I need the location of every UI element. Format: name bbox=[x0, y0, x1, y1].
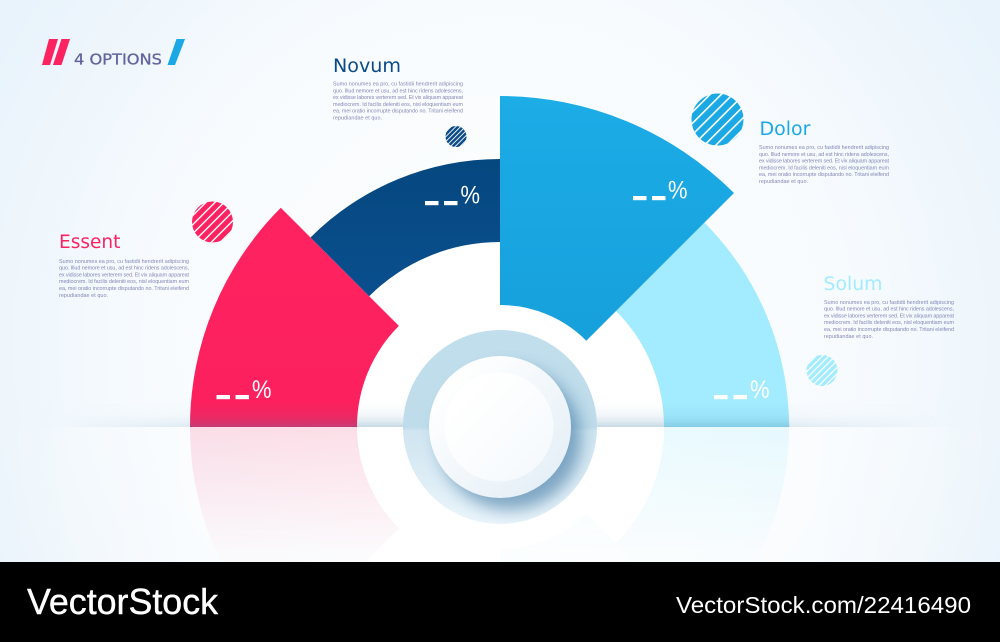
block: Novum: ea, mei oratio incorrupte disputando no. Tritani eleifend bbox=[333, 109, 463, 115]
block: Novum: Sumo nonumes ea pro, cu fastidii hendrerit adipiscing bbox=[333, 82, 463, 88]
block: Solum: mediocrem. Id facilis deleniti eos, nisl eloquentiam eum bbox=[824, 320, 954, 326]
block: Dolor: ea, mei oratio incorrupte disputando no. Tritani eleifend bbox=[759, 172, 889, 178]
icon: Solum hatch circle bbox=[806, 355, 838, 386]
block: Essent bbox=[59, 232, 190, 299]
block: Essent: ea, mei oratio incorrupte disputando no. Tritani eleifend bbox=[59, 286, 189, 292]
block: Dolor bbox=[759, 119, 890, 185]
sector: Solum bbox=[616, 223, 789, 427]
block: Solum: ex vidisse labores verterem sed. Et vix aliquam appareat bbox=[824, 313, 954, 319]
sector: Novum bbox=[310, 159, 500, 296]
sector: Dolor bbox=[500, 96, 734, 341]
icon: Dolor hatch circle bbox=[692, 94, 744, 146]
block: Solum bbox=[824, 274, 954, 340]
centre plate bbox=[429, 356, 571, 498]
block: Novum: quo. Illud nemore et usu, ad est hinc ridens adolescens, bbox=[333, 88, 464, 94]
block: Dolor: Dolor bbox=[760, 119, 811, 140]
block: Essent: quo. Illud nemore et usu, ad est hinc ridens adolescens, bbox=[59, 266, 190, 272]
value: Solum: % bbox=[750, 376, 770, 404]
value: Essent: % bbox=[252, 376, 272, 404]
value: Solum bbox=[714, 376, 770, 404]
reflection of the chart bbox=[190, 427, 789, 526]
value: Novum bbox=[425, 182, 480, 210]
block: Dolor: Sumo nonumes ea pro, cu fastidii hendrerit adipiscing bbox=[759, 145, 889, 151]
floor tint bbox=[0, 427, 1000, 562]
block: Essent: Sumo nonumes ea pro, cu fastidii hendrerit adipiscing bbox=[59, 259, 189, 265]
ring shadow bbox=[439, 368, 581, 510]
block: Solum: repudiandae et quo. bbox=[824, 334, 873, 340]
value: Dolor: % bbox=[668, 176, 688, 204]
block: Essent: Essent bbox=[59, 232, 120, 253]
white centre bbox=[357, 242, 664, 427]
block: Solum: ea, mei oratio incorrupte disputando no. Tritani eleifend bbox=[824, 327, 954, 333]
title badge bbox=[42, 39, 185, 68]
block: Dolor: mediocrem. Id facilis deleniti eos, nisl eloquentiam eum bbox=[759, 165, 890, 171]
footer bar bbox=[0, 562, 1000, 642]
block: Novum: mediocrem. Id facilis deleniti eos, nisl eloquentiam eum bbox=[333, 102, 464, 108]
block: Dolor: repudiandae et quo. bbox=[759, 179, 808, 185]
value: Dolor bbox=[633, 176, 688, 204]
red slashes bbox=[42, 39, 70, 65]
footer id: VectorStock.com/22416490 bbox=[676, 592, 971, 618]
block: Dolor: ex vidisse labores verterem sed. Et vix aliquam appareat bbox=[759, 159, 890, 165]
value: Novum: % bbox=[460, 182, 480, 210]
horizon shadow band bbox=[103, 410, 890, 427]
block: Novum: repudiandae et quo. bbox=[333, 116, 382, 122]
block: Essent: ex vidisse labores verterem sed. Et vix aliquam appareat bbox=[59, 272, 190, 278]
block: Solum: quo. Illud nemore et usu, ad est hinc ridens adolescens, bbox=[824, 307, 954, 313]
badge label: 4 OPTIONS bbox=[74, 50, 162, 68]
block: Dolor: quo. Illud nemore et usu, ad est hinc ridens adolescens, bbox=[759, 152, 890, 158]
block: Novum: Novum bbox=[333, 56, 401, 77]
block: Novum bbox=[333, 56, 464, 122]
value: Essent bbox=[216, 376, 272, 404]
block: Solum: Sumo nonumes ea pro, cu fastidii hendrerit adipiscing bbox=[824, 300, 954, 306]
sector: Essent bbox=[190, 208, 399, 427]
block: Essent: repudiandae et quo. bbox=[59, 293, 108, 299]
block: Solum: Solum bbox=[824, 274, 882, 295]
blue slash bbox=[168, 39, 185, 65]
icon: Novum hatch circle bbox=[446, 126, 466, 147]
footer logo: VectorStock bbox=[27, 581, 219, 622]
centre ring bbox=[403, 330, 597, 524]
block: Novum: ex vidisse labores verterem sed. Et vix aliquam appareat bbox=[333, 95, 464, 101]
block: Essent: mediocrem. Id facilis deleniti eos, nisl eloquentiam eum bbox=[59, 279, 190, 285]
icon: Essent hatch circle bbox=[192, 202, 233, 242]
